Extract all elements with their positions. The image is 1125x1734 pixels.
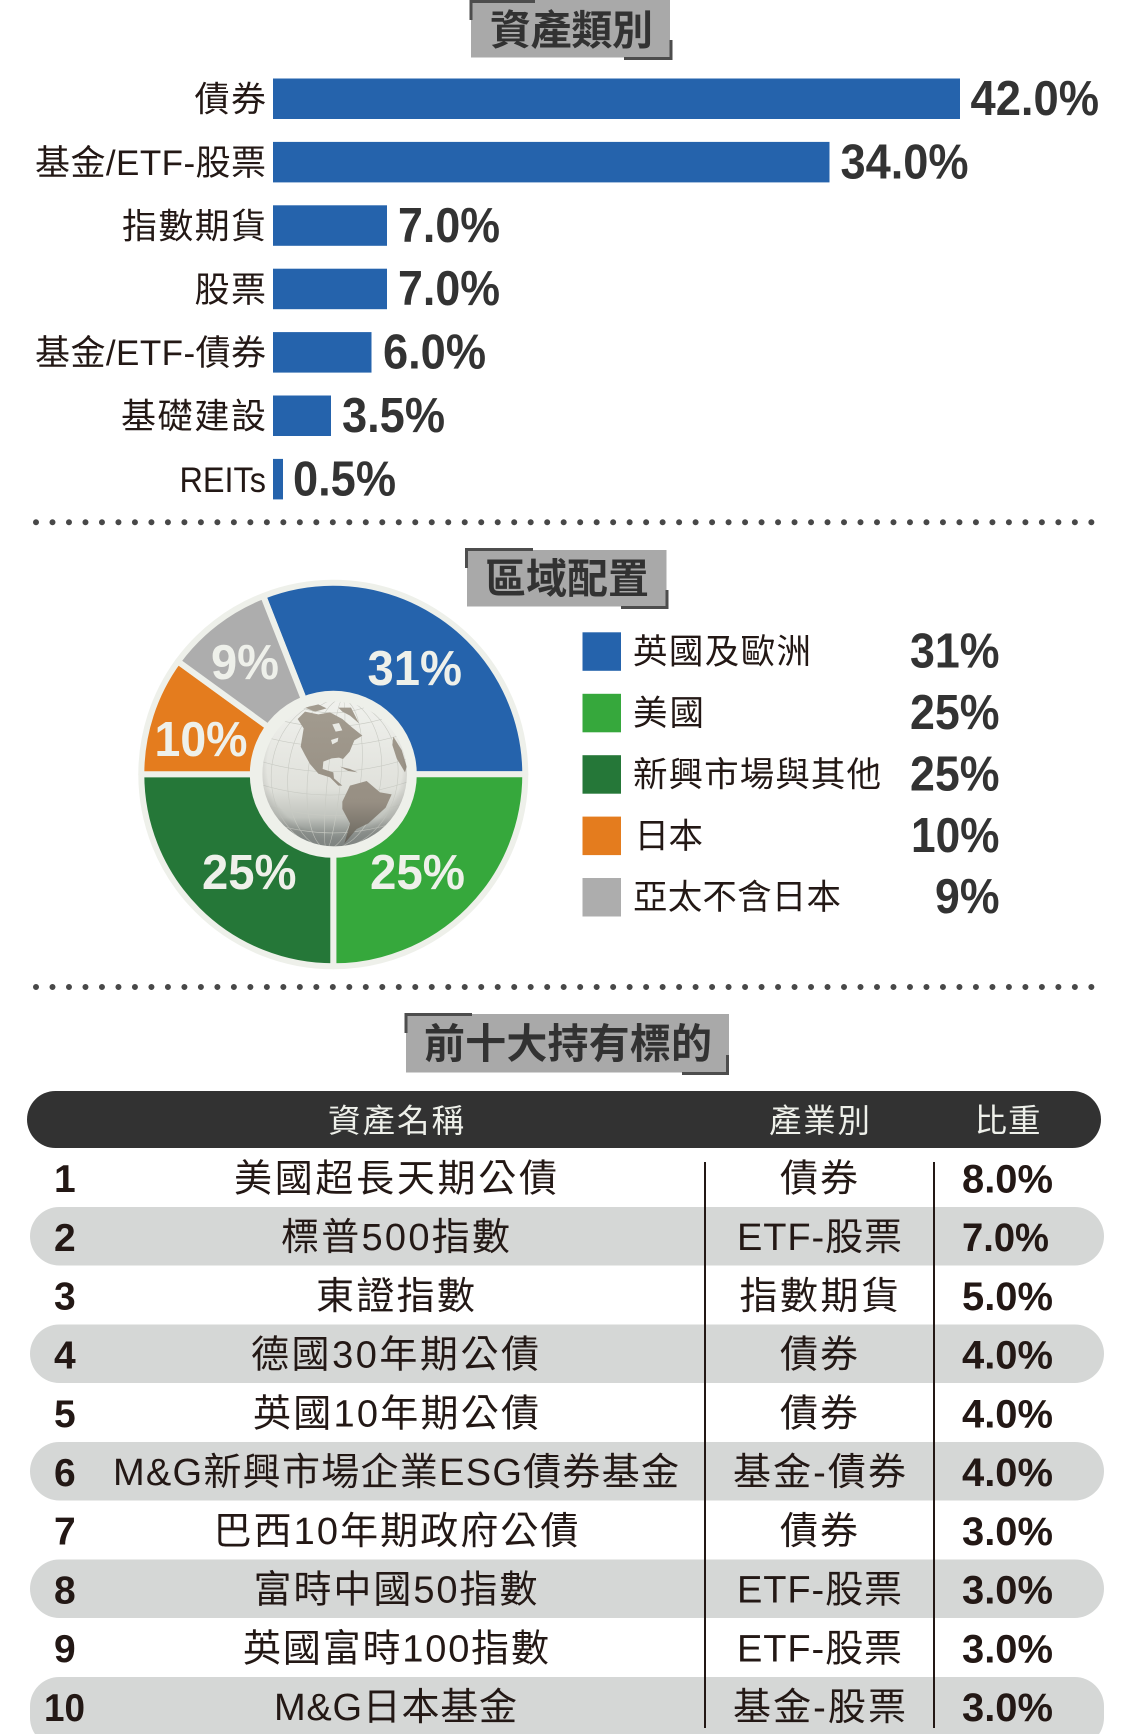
row 8: 8 <box>54 1569 76 1612</box>
row 5: 英國10年期公債 <box>253 1394 539 1436</box>
row 5: 5 <box>54 1393 76 1436</box>
section title: 資產類別 <box>471 0 671 58</box>
row 2 <box>54 1216 1049 1260</box>
legend row: 日本 10%: 10% <box>911 809 1000 863</box>
bar row: REITs 0.5%: 0.5% <box>293 452 396 506</box>
row 2: 7.0% <box>962 1216 1049 1260</box>
row 5: 債券 <box>780 1394 858 1436</box>
bar row: 基金/ETF-股票 34.0%: 34.0% <box>840 135 968 189</box>
row 7 <box>54 1510 1053 1554</box>
row 3: 3 <box>54 1276 76 1318</box>
row 1: 1 <box>54 1158 76 1201</box>
row 4 <box>54 1334 1053 1378</box>
bar row: 股票 7.0%: 7.0% <box>398 262 500 316</box>
row 8: 3.0% <box>962 1569 1053 1613</box>
bar row: 債券 42.0% <box>194 72 1099 126</box>
section title: 資產類別: 資產類別 <box>490 8 653 54</box>
icon: globe <box>262 702 407 846</box>
row 9: 英國富時100指數 <box>243 1628 549 1670</box>
legend: regions <box>582 624 1000 924</box>
legend row: 日本 10% <box>582 809 1000 863</box>
bar row: 指數期貨 7.0%: 指數期貨 <box>122 207 266 246</box>
legend row: 日本 10%: 日本 <box>634 818 703 856</box>
legend row: 新興市場與其他 25%: 25% <box>910 747 1000 801</box>
row 4: 4 <box>54 1334 76 1377</box>
row 3: 指數期貨 <box>740 1276 899 1318</box>
legend row: 美國 25%: 美國 <box>633 695 704 733</box>
row 3 <box>54 1275 1053 1319</box>
bar row: 基金/ETF-債券 6.0% <box>35 326 486 380</box>
bar row: 指數期貨 7.0%: 7.0% <box>398 199 500 253</box>
bar row: 基金/ETF-債券 6.0%: 6.0% <box>383 326 486 380</box>
row 2: 標普500指數 <box>281 1217 510 1259</box>
legend row: 美國 25% <box>582 686 1000 740</box>
row 6: M&G新興市場企業ESG債券基金 <box>113 1452 679 1494</box>
pie label: 10%: 10% <box>154 713 248 767</box>
row 5 <box>54 1392 1053 1436</box>
row 8: ETF-股票 <box>737 1570 902 1612</box>
row 1: 債券 <box>780 1158 858 1200</box>
row 7: 巴西10年期政府公債 <box>214 1511 578 1553</box>
bar row: REITs 0.5% <box>180 452 396 506</box>
legend row: 亞太不含日本 9%: 9% <box>935 870 1000 924</box>
pie label: 9%: 9% <box>211 636 279 690</box>
row 9: 9 <box>54 1628 76 1671</box>
bar chart: asset classes <box>35 72 1099 506</box>
section title: 前十大持有標的: 前十大持有標的 <box>424 1021 712 1067</box>
row 4: 債券 <box>780 1335 858 1377</box>
row 1: 美國超長天期公債 <box>234 1158 557 1200</box>
row 7: 3.0% <box>962 1510 1053 1554</box>
wedge: 美國 25% <box>333 774 525 966</box>
bar row: 基金/ETF-股票 34.0%: 基金/ETF-股票 <box>35 144 266 183</box>
bar row: 股票 7.0% <box>194 262 500 316</box>
wedge: 英國及歐洲 31% <box>263 583 525 774</box>
pie label: 25% dark green: 25% <box>202 846 296 900</box>
bar row: 債券 42.0%: 42.0% <box>970 72 1099 126</box>
row 10: 10 <box>44 1687 85 1730</box>
bar row: 基金/ETF-股票 34.0% <box>35 135 968 189</box>
table header: 資產名稱 <box>328 1103 464 1139</box>
row 10 <box>44 1686 1053 1730</box>
legend row: 美國 25%: 25% <box>910 686 1000 740</box>
legend row: 英國及歐洲 31%: 31% <box>910 624 1000 678</box>
bar row: REITs 0.5%: REITs <box>180 461 266 500</box>
wedge: 新興市場與其他 25% <box>141 774 333 966</box>
legend row: 英國及歐洲 31% <box>582 624 1000 678</box>
row 9 <box>54 1628 1053 1672</box>
row 10: 基金-股票 <box>733 1687 906 1729</box>
table header: 比重 <box>974 1103 1040 1139</box>
bar row: 基礎建設 3.5%: 基礎建設 <box>121 398 266 436</box>
section title: 區域配置: 區域配置 <box>485 556 649 602</box>
bar row: 股票 7.0%: 股票 <box>194 271 266 310</box>
legend row: 英國及歐洲 31%: 英國及歐洲 <box>633 634 811 672</box>
row 2: 2 <box>54 1217 76 1260</box>
row 4: 德國30年期公債 <box>251 1335 539 1377</box>
table header: 產業別 <box>769 1103 870 1139</box>
row 1: 8.0% <box>962 1158 1053 1202</box>
row 9: ETF-股票 <box>737 1628 902 1670</box>
row 2: ETF-股票 <box>737 1217 902 1259</box>
row 1 <box>54 1158 1053 1202</box>
row 6: 4.0% <box>962 1451 1053 1495</box>
row 6: 6 <box>54 1452 76 1495</box>
legend row: 亞太不含日本 9%: 亞太不含日本 <box>633 879 841 917</box>
row 3: 5.0% <box>962 1275 1053 1319</box>
bar row: 基金/ETF-債券 6.0%: 基金/ETF-債券 <box>35 334 266 373</box>
bar row: 指數期貨 7.0% <box>122 199 500 253</box>
legend row: 新興市場與其他 25%: 新興市場與其他 <box>633 756 881 794</box>
legend row: 亞太不含日本 9% <box>582 870 1000 924</box>
row 6: 基金-債券 <box>733 1452 906 1494</box>
row 10: 3.0% <box>962 1686 1053 1730</box>
legend row: 新興市場與其他 25% <box>582 747 1000 801</box>
donut chart: regional allocation <box>139 580 527 968</box>
wedge: 亞太不含日本 9% <box>178 596 333 774</box>
row 4: 4.0% <box>962 1334 1053 1378</box>
wedge: 日本 10% <box>141 661 333 774</box>
pie label: 31%: 31% <box>368 642 462 696</box>
section title: 前十大持有標的 <box>406 1014 729 1074</box>
row 10: M&G日本基金 <box>274 1687 517 1729</box>
row 8 <box>54 1569 1053 1613</box>
row 5: 4.0% <box>962 1392 1053 1436</box>
row 6 <box>54 1451 1053 1495</box>
pie label: 25% green: 25% <box>370 846 465 900</box>
row 9: 3.0% <box>962 1628 1053 1672</box>
row 8: 富時中國50指數 <box>254 1570 538 1612</box>
table header <box>27 1091 1101 1148</box>
table: top ten holdings <box>27 1091 1104 1734</box>
row 7: 7 <box>54 1510 76 1554</box>
row 3: 東證指數 <box>316 1276 475 1318</box>
row 7: 債券 <box>780 1511 858 1553</box>
bar row: 基礎建設 3.5%: 3.5% <box>342 389 445 443</box>
bar row: 基礎建設 3.5% <box>121 389 445 443</box>
section title: 區域配置 <box>466 550 667 608</box>
bar row: 債券 42.0%: 債券 <box>194 80 266 120</box>
